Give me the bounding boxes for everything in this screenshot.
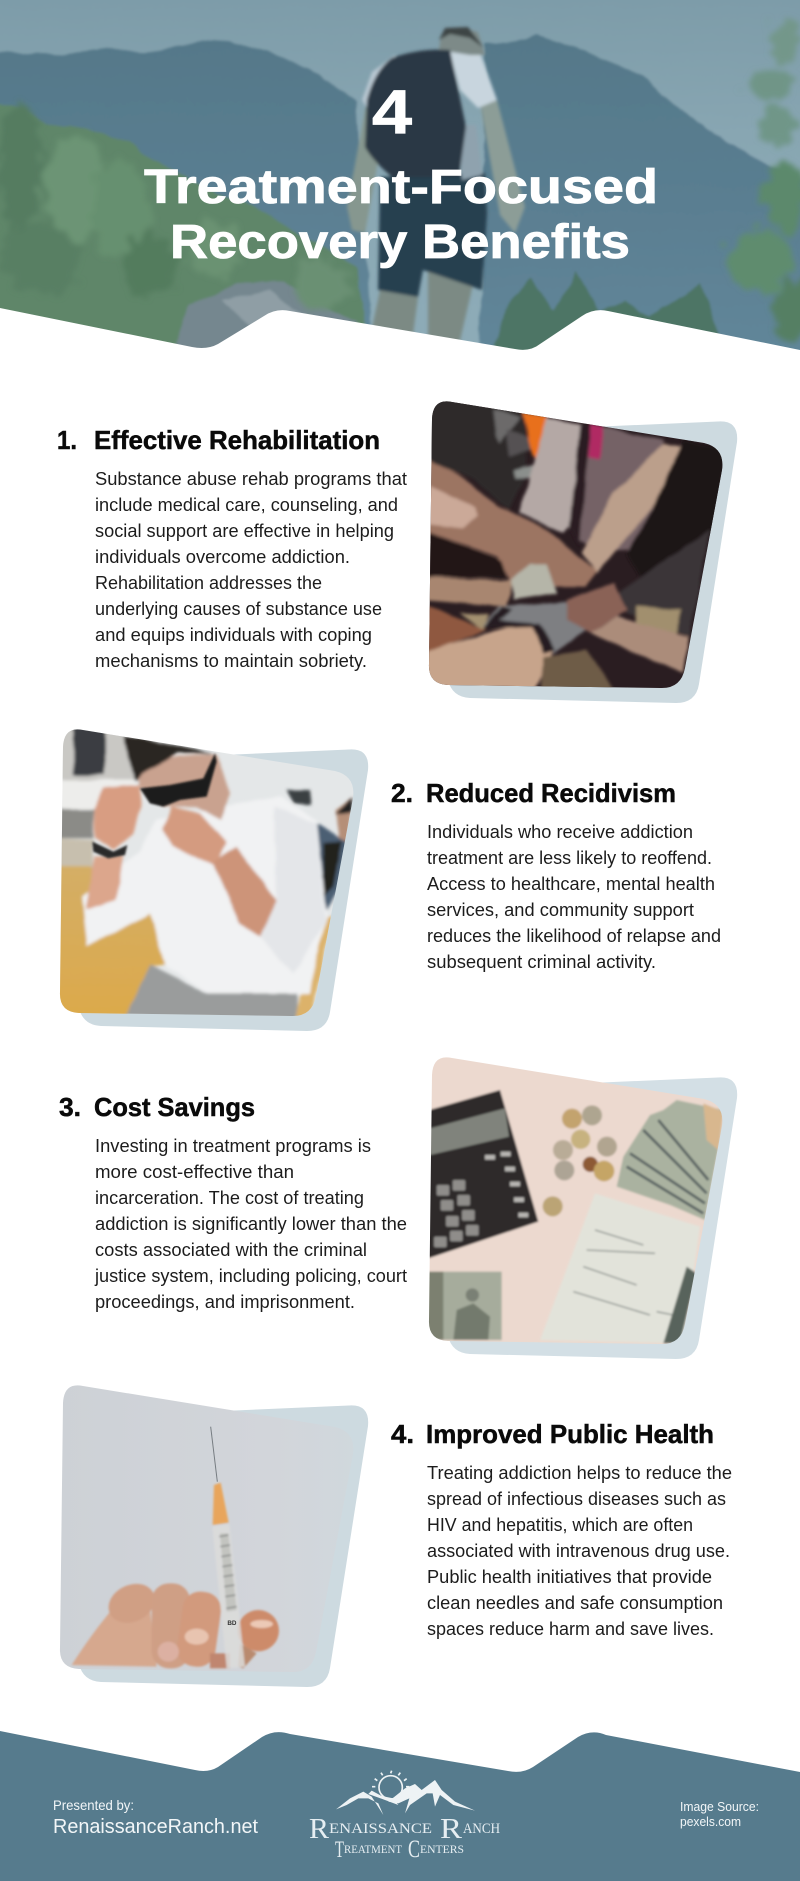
heading 2: 2. <box>391 778 413 808</box>
photo: man rubbing eyes <box>60 729 354 1016</box>
heading 1: Effective Rehabilitation <box>94 425 380 455</box>
panel 4: improved public health <box>57 1377 732 1687</box>
logo wordmark: R <box>309 1813 330 1845</box>
body text 1: include medical care, counseling, and <box>95 494 398 515</box>
body text 4: HIV and hepatitis, which are often <box>427 1514 693 1535</box>
body text 3: proceedings, and imprisonment. <box>95 1291 355 1312</box>
title <box>144 78 658 269</box>
photo: hand holding syringe <box>60 1385 282 1671</box>
heading 1: 1. <box>57 425 77 455</box>
body text 4: associated with intravenous drug use. <box>427 1540 730 1561</box>
logo wordmark: ENTERS <box>420 1844 464 1856</box>
body text 2: treatment are less likely to reoffend. <box>427 847 712 868</box>
footer: presented by: Presented by: <box>53 1797 134 1813</box>
body text 1: and equips individuals with coping <box>95 624 372 645</box>
logo wordmark: C <box>408 1836 420 1863</box>
photo: hands joined <box>428 401 722 688</box>
logo wordmark: ENAISSANCE <box>329 1821 432 1837</box>
body text 1: Rehabilitation addresses the <box>95 572 322 593</box>
body text 2 <box>427 821 721 972</box>
body text 4: spaces reduce harm and save lives. <box>427 1618 714 1639</box>
title: Treatment-Focused <box>144 161 658 214</box>
backing shape 3 <box>448 1077 737 1359</box>
backing shape 2 <box>79 749 368 1031</box>
logo wordmark: R <box>440 1813 463 1845</box>
footer band <box>0 1731 800 1881</box>
hiker figure <box>347 27 525 345</box>
title: 4 <box>372 78 413 147</box>
body text 3: costs associated with the criminal <box>95 1239 367 1260</box>
header banner: hiker photo with blue overlay <box>0 0 800 350</box>
body text 2: Access to healthcare, mental health <box>427 873 715 894</box>
heading 4: Improved Public Health <box>426 1419 714 1449</box>
body text 3: addiction is significantly lower than the <box>95 1213 407 1234</box>
footer: image source: Image Source: <box>680 1799 759 1814</box>
footer: presented by: RenaissanceRanch.net <box>53 1816 258 1838</box>
logo icon: sun and mountains <box>336 1771 475 1815</box>
logo wordmark <box>309 1813 500 1863</box>
heading 4: 4. <box>391 1419 414 1449</box>
photo: hand holding syringe: BD <box>227 1620 237 1627</box>
body text 4: spread of infectious diseases such as <box>427 1488 726 1509</box>
heading 3: 3. <box>59 1092 81 1122</box>
body text 4: Treating addiction helps to reduce the <box>427 1462 732 1483</box>
logo: Renaissance Ranch Treatment Centers <box>309 1771 500 1863</box>
footer: image source: pexels.com <box>680 1814 741 1829</box>
body text 4: Public health initiatives that provide <box>427 1566 712 1587</box>
body text 1: social support are effective in helping <box>95 520 394 541</box>
panel 2: reduced recidivism <box>50 720 721 1031</box>
logo wordmark: T <box>335 1837 344 1862</box>
photo background: sky, mountains, trees <box>0 0 800 350</box>
foliage detail <box>0 18 800 340</box>
body text 4: clean needles and safe consumption <box>427 1592 723 1613</box>
logo wordmark: REATMENT <box>344 1844 402 1856</box>
body text 3: incarceration. The cost of treating <box>95 1187 364 1208</box>
heading 2: Reduced Recidivism <box>426 778 676 808</box>
white wave edge of header <box>0 308 800 420</box>
heading 3: Cost Savings <box>94 1092 255 1122</box>
footer: presented by <box>53 1797 258 1838</box>
title: Recovery Benefits <box>170 216 630 269</box>
body text 3: Investing in treatment programs is <box>95 1135 371 1156</box>
footer: image source <box>680 1799 759 1829</box>
body text 2: Individuals who receive addiction <box>427 821 693 842</box>
body text 1: underlying causes of substance use <box>95 598 382 619</box>
body text 1: Substance abuse rehab programs that <box>95 468 407 489</box>
body text 3 <box>94 1135 407 1312</box>
body text 1: individuals overcome addiction. <box>95 546 350 567</box>
panel 1: effective rehabilitation <box>57 390 740 703</box>
backing shape 1 <box>448 421 737 703</box>
body text 2: services, and community support <box>427 899 694 920</box>
logo wordmark: ANCH <box>463 1821 500 1837</box>
backing shape 4 <box>79 1405 368 1687</box>
body text 4 <box>427 1462 732 1639</box>
body text 3: justice system, including policing, court <box>94 1265 407 1286</box>
panel 3: cost savings <box>59 1047 737 1359</box>
body text 3: more cost-effective than <box>95 1161 294 1182</box>
body text 2: reduces the likelihood of relapse and <box>427 925 721 946</box>
photo: calculator, coins and cash <box>428 1057 722 1344</box>
body text 2: subsequent criminal activity. <box>427 951 656 972</box>
body text 1 <box>95 468 407 671</box>
body text 1: mechanisms to maintain sobriety. <box>95 650 367 671</box>
